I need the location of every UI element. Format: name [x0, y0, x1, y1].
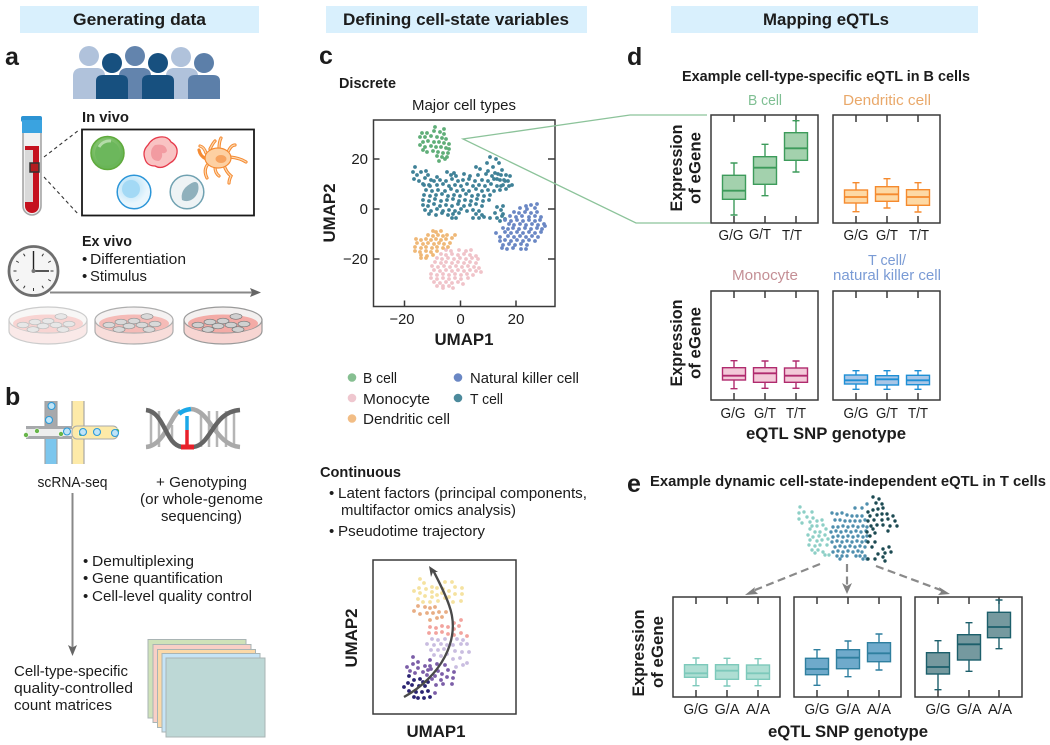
icon: culture dish 3: [184, 307, 262, 344]
arrow: pseudotime trajectory: [404, 566, 453, 697]
arrowheads: [745, 583, 950, 595]
dots: pseudotime purple: [407, 657, 454, 693]
panel label d: d: [627, 43, 642, 71]
text: Continuous: •: [329, 485, 334, 502]
chart: B cell boxplot: T/T: [782, 227, 802, 244]
chart: mid-state boxplot: G/G: [804, 701, 830, 718]
panel label e: e: [627, 470, 641, 498]
y label row 1: Expression: [667, 124, 686, 212]
chart: Dendritic cell boxplot: [833, 92, 940, 244]
arrow: down to matrices: [68, 493, 77, 656]
chart: B cell boxplot: G/G: [718, 227, 744, 244]
chart: T cell / natural killer cell boxplot: G/T: [876, 405, 898, 422]
chart: high-state boxplot: [915, 597, 1022, 718]
text: genotyping: (or whole-genome: [140, 491, 263, 508]
chart: B cell boxplot: G/T: [749, 226, 771, 243]
y label row 2: [667, 300, 704, 386]
text: Continuous: Continuous: [320, 464, 401, 481]
arrow: time: [50, 288, 261, 297]
arrows: dashed state to panels: [750, 564, 946, 592]
dots: pseudotime orange: [414, 606, 446, 620]
legend: cell types: T cell: [470, 391, 503, 408]
text: Ex vivo: Ex vivo: [82, 233, 132, 250]
chart: B cell boxplot: B cell: [748, 92, 782, 109]
icon: group of people: [73, 46, 220, 99]
chart: T cell / natural killer cell boxplot: T cell/: [868, 252, 907, 269]
text: processing bullets: [83, 553, 252, 605]
panel label a: a: [5, 43, 20, 71]
icon: blue cell: [117, 175, 151, 209]
x tick labels: 0: [456, 311, 465, 328]
dots: pseudotime lavender: [427, 639, 469, 667]
dots: monocyte: [431, 250, 481, 288]
text: genotyping: + Genotyping: [156, 474, 247, 491]
dashed zoom lines: [44, 130, 79, 215]
y label e: of eGene: [648, 616, 667, 688]
text: genotyping: [140, 474, 263, 525]
header: Generating data: [20, 6, 259, 33]
text: Continuous: multifactor omics analysis): [341, 502, 516, 519]
icon: blood tube: [21, 116, 42, 215]
dots: natural killer cell: [496, 204, 545, 249]
chart: pseudotime UMAP: [342, 560, 516, 741]
heading d: Example cell-type-specific eQTL in B cells: [682, 68, 970, 85]
x axis title d: eQTL SNP genotype: [746, 424, 906, 443]
dots: pseudotime salmon: [429, 620, 467, 636]
header: Defining cell-state variables: Defining cell-state variables: [343, 10, 569, 29]
text: count matrices caption: count matrices: [14, 697, 112, 714]
x axis title e: eQTL SNP genotype: [768, 722, 928, 741]
text: processing bullets: •: [83, 553, 88, 570]
chart: low-state boxplot: [673, 597, 780, 718]
chart: Monocyte boxplot: G/G: [720, 405, 746, 422]
text: processing bullets: •: [83, 588, 88, 605]
y label row 2: of eGene: [686, 307, 704, 379]
legend: cell types: B cell: [363, 370, 397, 387]
chart: Dendritic cell boxplot: G/G: [844, 227, 868, 244]
legend: cell types: Monocyte: [363, 391, 430, 408]
chart: Monocyte boxplot: G/T: [754, 405, 776, 422]
panel label c: c: [319, 42, 333, 70]
bullet: Differentiation: Differentiation: [90, 251, 186, 268]
y label row 2: Expression: [667, 300, 686, 386]
icon: stacked count matrices: [148, 640, 265, 737]
text: Ex vivo: [82, 233, 186, 285]
text: processing bullets: Demultiplexing: [92, 553, 194, 570]
icon: red monocyte: [144, 137, 177, 167]
chart: high-state boxplot: A/A: [988, 701, 1012, 718]
chart: low-state boxplot: A/A: [746, 701, 770, 718]
header: Mapping eQTLs: [671, 6, 978, 33]
dots: pseudotime yellow: [414, 579, 462, 602]
text: processing bullets: Cell-level quality control: [92, 588, 252, 605]
chart: mid-state boxplot: A/A: [867, 701, 891, 718]
header: Generating data: Generating data: [73, 10, 207, 29]
y tick labels: [343, 151, 368, 268]
dots: dendritic cell: [415, 231, 455, 258]
x tick labels: [390, 311, 524, 328]
chart: Monocyte boxplot: Monocyte: [732, 267, 798, 284]
text: processing bullets: •: [83, 570, 88, 587]
chart: T cell / natural killer cell boxplot: [833, 252, 941, 422]
icon: gray cell: [170, 175, 204, 209]
icon: culture dish 1: [9, 307, 87, 344]
dots: T cell: [413, 157, 512, 221]
dots: pseudotime navy: [404, 676, 430, 698]
chart: high-state boxplot: G/G: [926, 701, 950, 718]
y label row 1: [667, 124, 704, 212]
text: count matrices caption: quality-controlled: [14, 680, 133, 697]
y label e: [629, 610, 667, 696]
chart title: Major cell types: [412, 97, 516, 114]
icon: orange dendritic cell: [199, 138, 246, 183]
legend: cell types: [348, 370, 579, 428]
panel: in vivo cells: [82, 130, 254, 216]
icon: DNA helix with variant: [146, 409, 240, 447]
y label e: Expression: [629, 610, 648, 696]
text: processing bullets: Gene quantification: [92, 570, 223, 587]
bullet: Differentiation: •: [82, 251, 87, 268]
chart: Dendritic cell boxplot: G/T: [876, 227, 898, 244]
chart: Monocyte boxplot: [711, 267, 818, 422]
chart: mid-state boxplot: G/A: [836, 701, 860, 718]
text: Continuous: •: [329, 523, 334, 540]
chart: high-state boxplot: G/A: [956, 701, 982, 718]
text: genotyping: sequencing): [161, 508, 242, 525]
panel label b: b: [5, 383, 20, 411]
text: Discrete: Discrete: [339, 75, 396, 92]
chart: B cell boxplot: [711, 92, 818, 244]
header: Defining cell-state variables: [326, 6, 587, 33]
y tick labels: −20: [343, 251, 368, 268]
legend: cell types: Natural killer cell: [470, 370, 579, 387]
heading e: Example dynamic cell-state-independent eQTL in T cells: [650, 473, 1046, 490]
chart: Dendritic cell boxplot: Dendritic cell: [843, 92, 931, 109]
icon: microfluidic droplet device: [24, 401, 120, 464]
text: Continuous: Pseudotime trajectory: [338, 523, 485, 540]
y axis title: UMAP2: [342, 608, 361, 668]
text: scRNA-seq: scRNA-seq: [38, 474, 108, 491]
chart: mid-state boxplot: [794, 597, 901, 718]
icon: clock: [9, 246, 58, 296]
x axis title: UMAP1: [406, 722, 466, 741]
legend: cell types: Dendritic cell: [363, 411, 450, 428]
icon: culture dish 2: [95, 307, 173, 344]
chart: low-state boxplot: G/G: [684, 701, 708, 718]
dots: B cell: [420, 127, 449, 161]
x axis title: UMAP1: [434, 330, 494, 349]
chart: T cell / natural killer cell boxplot: T/T: [908, 405, 928, 422]
y tick labels: 20: [351, 151, 368, 168]
chart: T cell / natural killer cell boxplot: natural killer cell: [833, 267, 941, 284]
chart: low-state boxplot: G/A: [714, 701, 740, 718]
bullet: Stimulus: Stimulus: [90, 268, 147, 285]
bullet: Stimulus: •: [82, 268, 87, 285]
header: Mapping eQTLs: Mapping eQTLs: [763, 10, 889, 29]
y tick labels: 0: [360, 201, 368, 218]
chart: T cell / natural killer cell boxplot: G/G: [844, 405, 868, 422]
text: count matrices caption: Cell-type-specific: [14, 663, 128, 680]
chart: T cell state scatter: [799, 497, 897, 561]
connector lines to B cell panel: [463, 115, 710, 223]
y axis title: UMAP2: [320, 184, 339, 242]
text: In vivo: In vivo: [82, 109, 129, 126]
y label row 1: of eGene: [686, 132, 704, 204]
text: Continuous: [320, 464, 587, 540]
chart: Monocyte boxplot: T/T: [786, 405, 806, 422]
chart: UMAP major cell types: [320, 97, 710, 349]
icon: green cell: [91, 136, 124, 170]
text: count matrices caption: [14, 663, 133, 714]
x tick labels: 20: [508, 311, 524, 328]
chart: Dendritic cell boxplot: T/T: [909, 227, 929, 244]
text: Continuous: Latent factors (principal components,: [338, 485, 587, 502]
x tick labels: −20: [390, 311, 414, 328]
